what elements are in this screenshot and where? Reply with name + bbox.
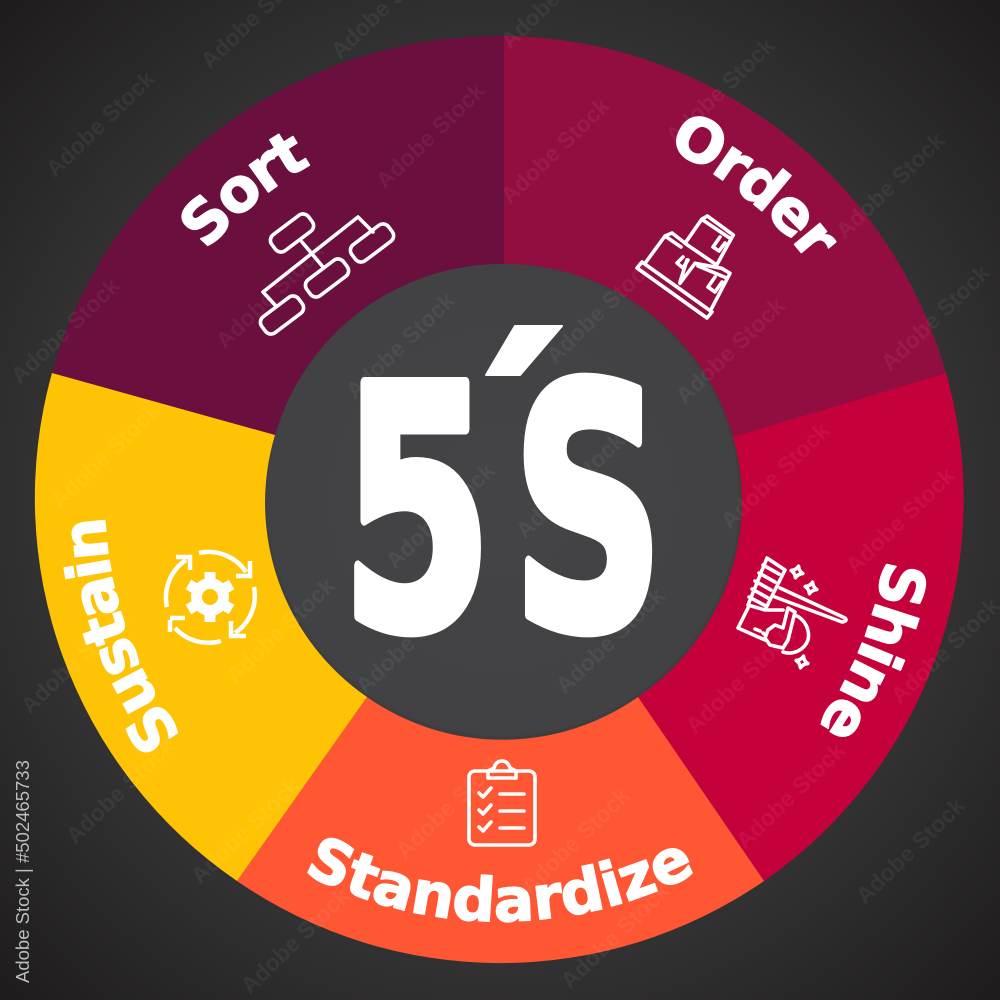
icon: squeegee, hand and bucket (738, 558, 846, 669)
label: Sustain: Sustain (63, 520, 178, 752)
watermark: Adobe Stock (60, 732, 180, 849)
watermark: Adobe Stock (660, 32, 780, 149)
watermark: Adobe Stock (495, 92, 615, 209)
icon: gear with circular arrows (166, 552, 255, 643)
watermark: Adobe Stock (45, 397, 165, 514)
digit 5: 5 (341, 316, 493, 706)
label: Standardize: Standardize (307, 838, 693, 923)
sparkles (790, 565, 804, 579)
watermark: Adobe Stock (15, 602, 135, 719)
watermark: Adobe Stock (670, 292, 790, 409)
watermark: Adobe Stock (680, 622, 800, 739)
panel: sort segment (52, 36, 504, 435)
letter S: S (512, 317, 664, 707)
heading: 5'S (341, 316, 664, 707)
watermark: Adobe Stock (370, 77, 490, 194)
accent mark (486, 326, 562, 375)
watermark: Adobe Stock (730, 737, 850, 854)
panel: sustain segment (35, 373, 367, 881)
icon: clipboard checklist (469, 761, 535, 845)
center circle (267, 264, 739, 736)
watermark: Adobe Stock (340, 287, 460, 404)
watermark: Adobe Stock (220, 572, 340, 689)
watermark: Adobe Stock (875, 259, 995, 376)
watermark: Adobe Stock (350, 582, 470, 699)
watermark: Adobe Stock (210, 237, 330, 354)
label: Order: Order (676, 116, 837, 254)
gear (188, 572, 232, 622)
watermark: Adobe Stock (380, 457, 500, 574)
icon: boxes on pallet (637, 216, 733, 318)
watermark: Adobe Stock (555, 877, 675, 994)
watermark: Adobe Stock (830, 127, 950, 244)
panel: standardize segment (237, 697, 764, 963)
watermark: Adobe Stock (40, 65, 160, 182)
watermark: Adobe Stock (715, 417, 835, 534)
stock id caption: Adobe Stock | #502465733 (12, 760, 33, 983)
circular arrows (166, 552, 255, 643)
watermark: Adobe Stock (515, 782, 635, 899)
watermark: Adobe Stock (185, 772, 305, 889)
watermark: Adobe Stock (235, 882, 355, 999)
watermark: Adobe Stock (390, 747, 510, 864)
watermark: Adobe Stock (550, 582, 670, 699)
watermark: Adobe Stock (840, 462, 960, 579)
panel: shine segment (638, 373, 964, 881)
watermark: Adobe Stock (540, 252, 660, 369)
icon: flow chart (258, 211, 396, 337)
watermark: Adobe Stock (850, 792, 970, 909)
label: Shine: Shine (820, 564, 926, 737)
watermark: Adobe Stock (510, 427, 630, 544)
panel: order segment (504, 36, 946, 437)
label: Sort: Sort (181, 134, 310, 246)
watermark: Adobe Stock (5, 272, 125, 389)
